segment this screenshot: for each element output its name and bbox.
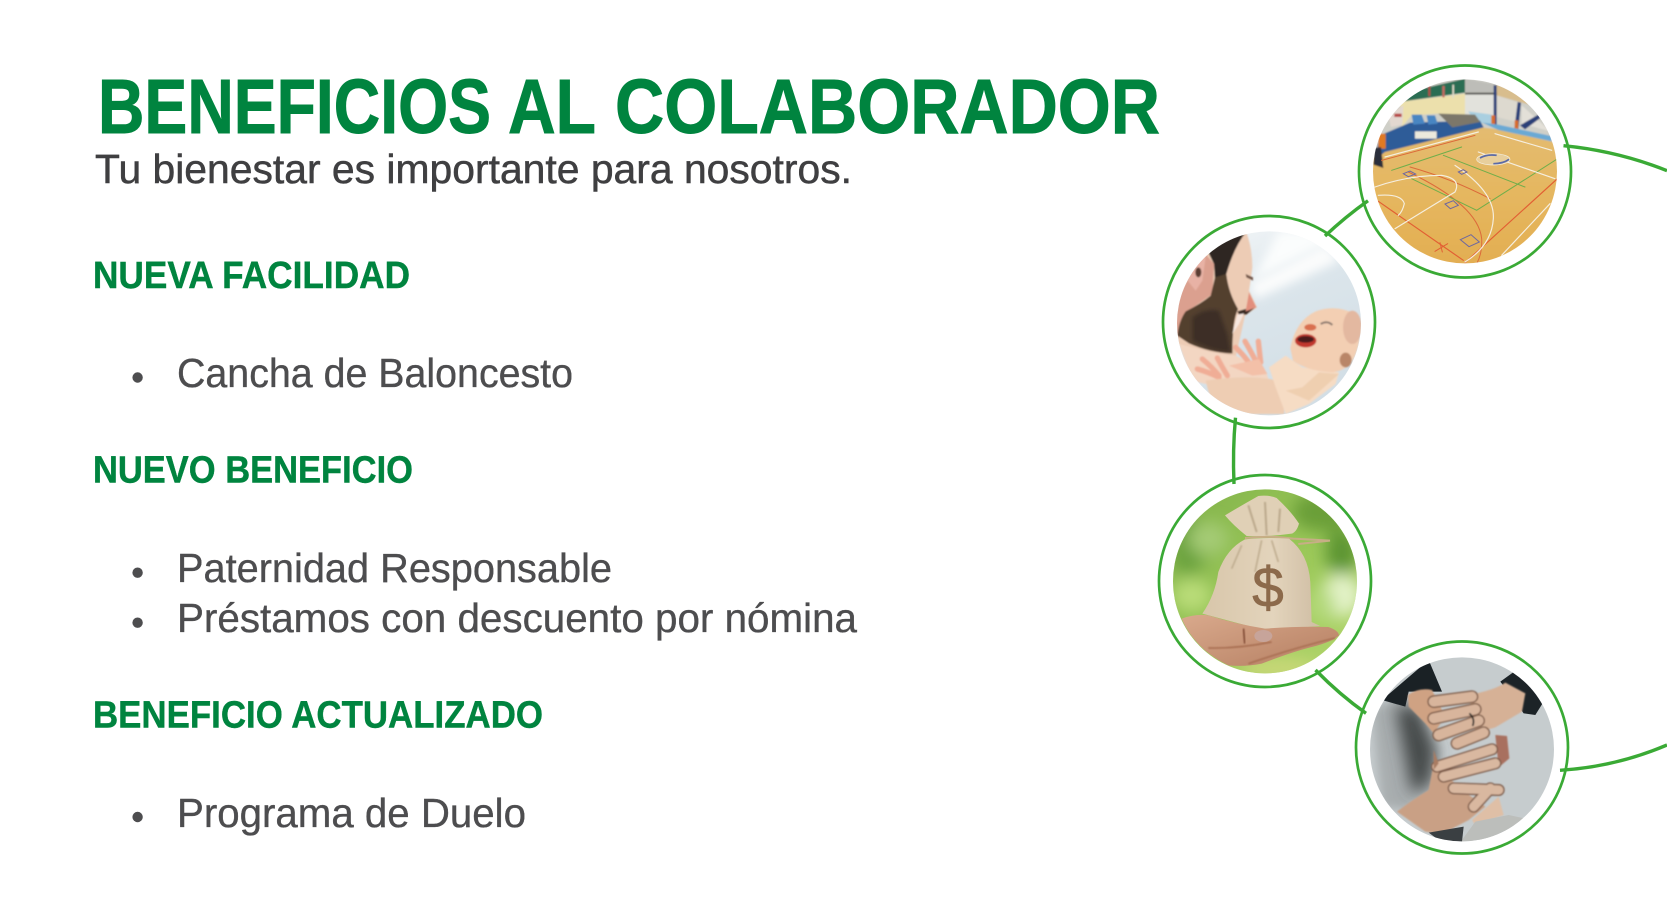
title: BENEFICIOS [98, 64, 491, 150]
title: AL [508, 64, 596, 150]
list: nuevo beneficio: Paternidad Responsable [177, 545, 612, 591]
ring: money bag [1159, 475, 1371, 687]
subtitle: Tu bienestar es importante para nosotros. [95, 146, 852, 192]
floor [1373, 126, 1557, 264]
sweater [1462, 815, 1523, 842]
ring: father and baby [1163, 216, 1375, 428]
lower hand [1397, 735, 1509, 834]
ring: joined hands [1356, 642, 1568, 854]
list: beneficio actualizado: Programa de Duelo [177, 790, 526, 836]
list: nuevo beneficio [132, 545, 857, 641]
court lines [1375, 132, 1557, 264]
photo: joined hands [1370, 657, 1554, 842]
ring: basketball court [1359, 66, 1571, 278]
upper hand [1408, 683, 1525, 743]
photo: father and baby [1177, 232, 1361, 416]
blue apron [1376, 120, 1484, 155]
list: nuevo beneficio: Préstamos con descuento por nómina [177, 595, 857, 641]
hand [1182, 615, 1339, 666]
dollar sign: $ [1252, 557, 1284, 620]
list: nueva facilidad: Cancha de Baloncesto [177, 350, 573, 396]
photo: money bag [1173, 489, 1357, 674]
baby [1269, 308, 1362, 414]
connector lines [1234, 146, 1667, 770]
title [98, 64, 1160, 150]
section heading: nueva facilidad: NUEVA FACILIDAD [93, 255, 410, 297]
sleeves [1382, 660, 1442, 707]
photo: basketball court [1373, 79, 1557, 264]
father [1169, 231, 1285, 414]
title: COLABORADOR [615, 64, 1160, 150]
section heading: nuevo beneficio: NUEVO BENEFICIO [93, 450, 413, 492]
section heading: beneficio actualizado: BENEFICIO ACTUALIZADO [93, 694, 543, 736]
